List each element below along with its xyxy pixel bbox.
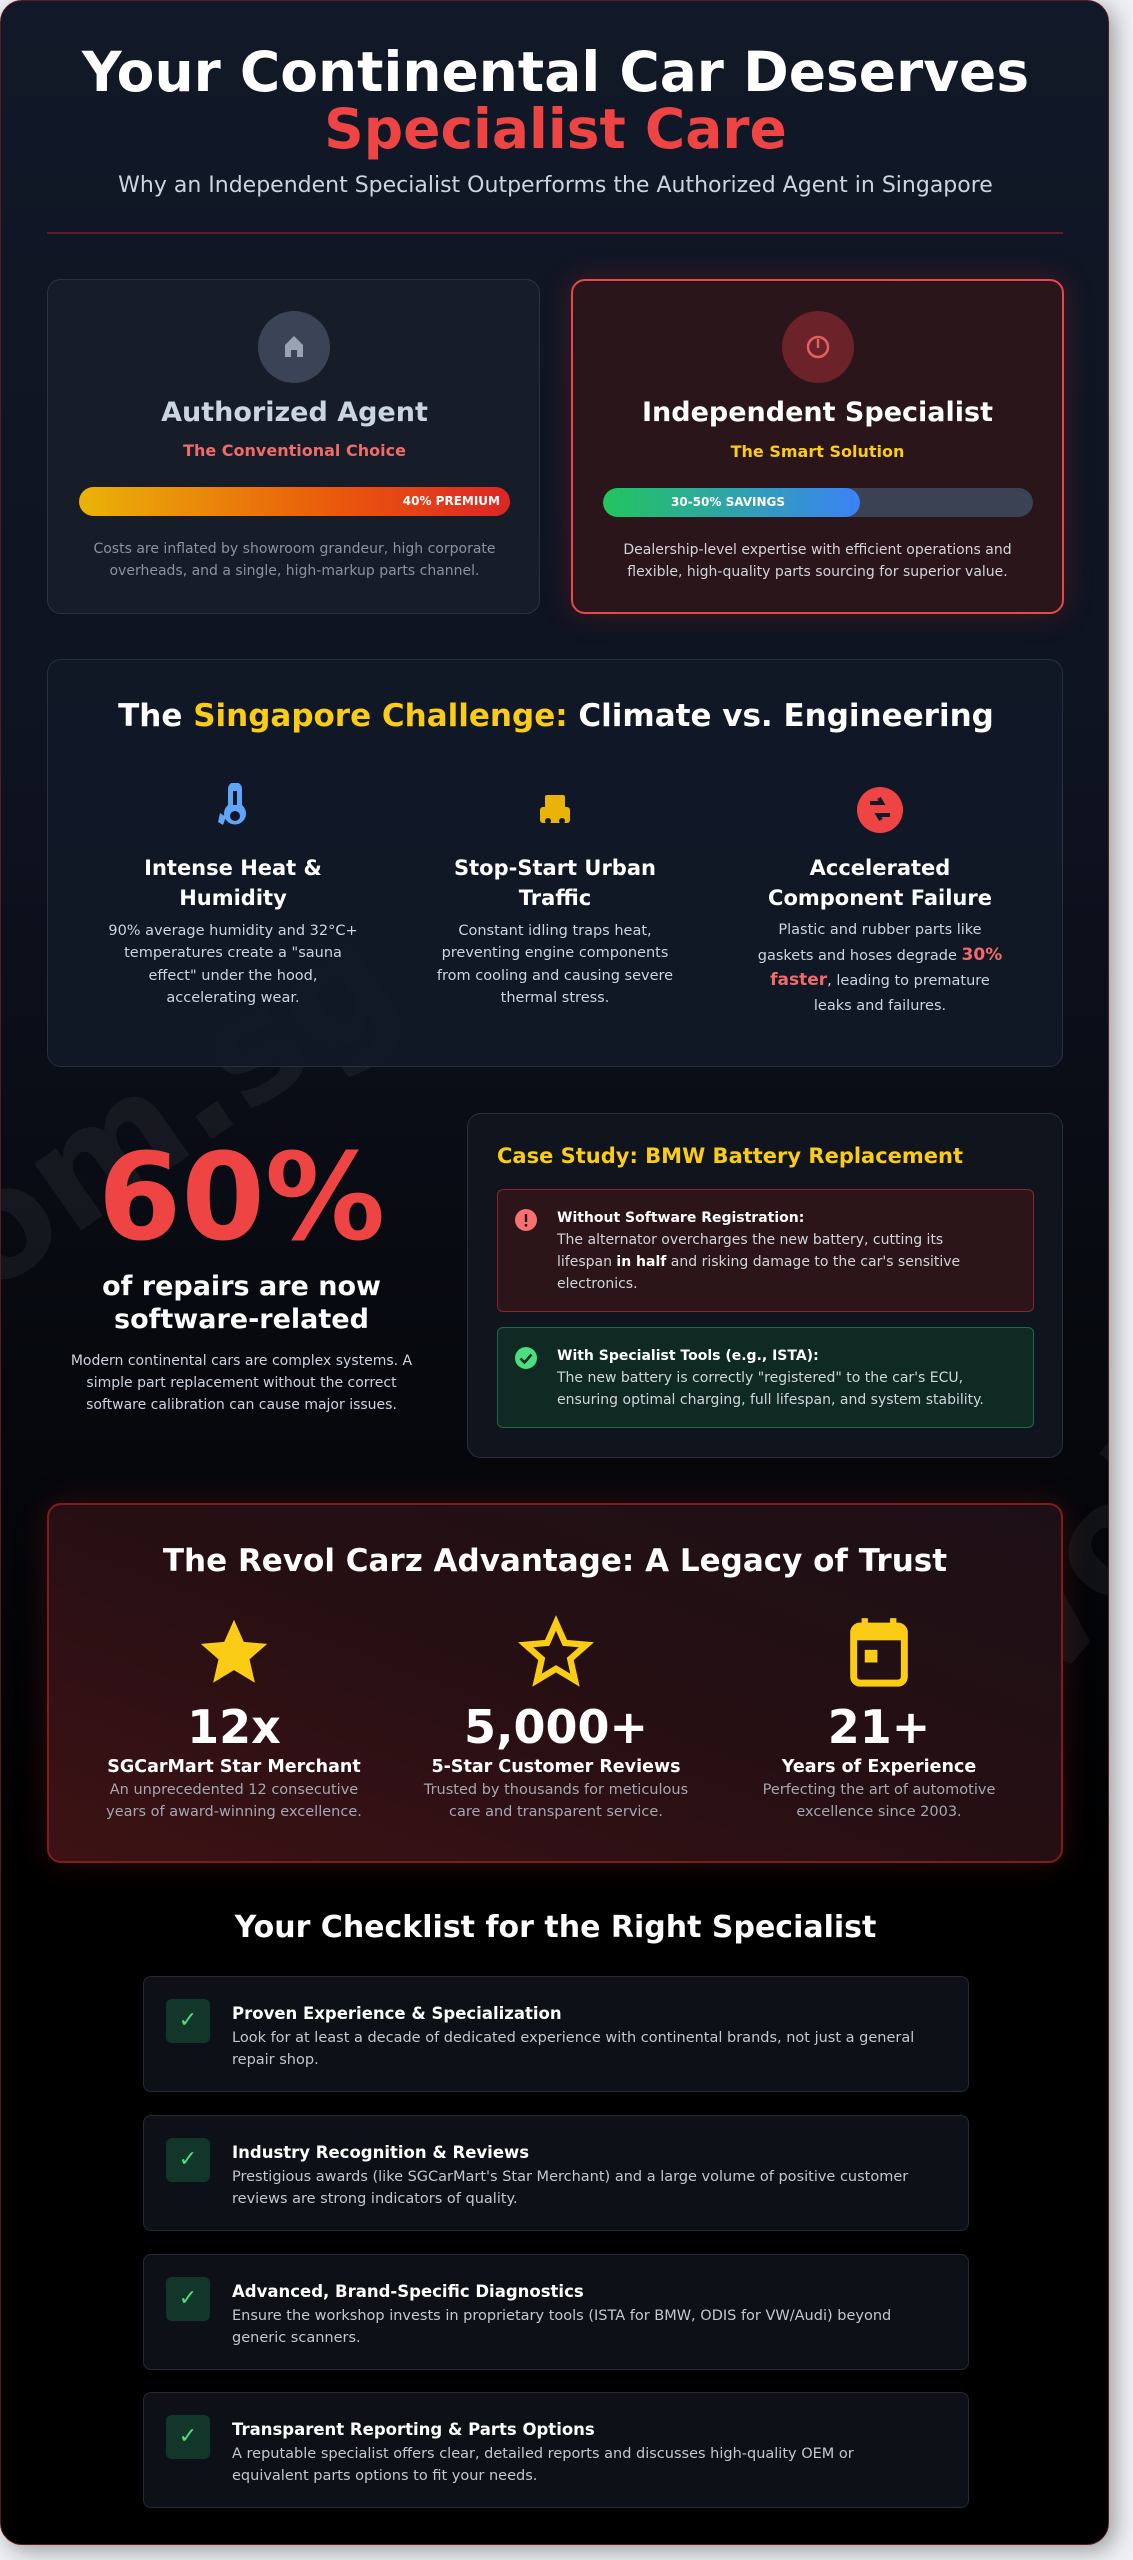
bar: premium: 40% PREMIUM <box>403 494 500 508</box>
icon: gauge <box>782 311 854 383</box>
icon: broken part <box>857 787 903 833</box>
column: heat <box>108 783 358 1006</box>
stat: reviews <box>424 1615 688 1820</box>
heading: Independent Specialist <box>642 397 993 428</box>
heading: The Singapore Challenge: Climate vs. Engineering <box>118 698 994 734</box>
subheading: The Conventional Choice <box>183 441 406 460</box>
checklist item 2: ✓ <box>179 2147 197 2172</box>
column: failure <box>758 787 1002 1014</box>
icon: house <box>258 311 330 383</box>
callout: with specialist tools: The new battery is correctly "registered" to the car's ECU, ensuring optimal charging, full lifespan, and system stability. <box>557 1370 984 1408</box>
bar: premium <box>79 487 510 516</box>
callout: without registration: Without Software Registration: <box>557 1210 804 1226</box>
stat: 60% software: of repairs are now software-related <box>102 1271 381 1335</box>
panel: authorized agent <box>47 279 540 614</box>
bar: savings: 30-50% SAVINGS <box>671 495 785 509</box>
stat: reviews: Trusted by thousands for meticulous care and transparent service. <box>424 1782 688 1820</box>
column: heat: Intense Heat & Humidity <box>144 856 322 910</box>
panel: independent specialist <box>571 279 1064 614</box>
callout: without registration <box>497 1189 1034 1312</box>
column: failure: faster, leading to premature <box>770 970 990 990</box>
checklist item 2: Prestigious awards (like SGCarMart's Star Merchant) and a large volume of positive customer <box>232 2169 908 2185</box>
checklist item 4 <box>143 2392 969 2508</box>
checklist item 2: Industry Recognition & Reviews <box>232 2143 529 2162</box>
subtitle: Why an Independent Specialist Outperforms the Authorized Agent in Singapore <box>118 173 993 198</box>
stat: 60% software <box>71 1129 412 1413</box>
callout: with specialist tools <box>497 1327 1034 1428</box>
heading: The Revol Carz Advantage: A Legacy of Trust <box>163 1543 947 1579</box>
stat: star merchant: 12x <box>187 1700 281 1754</box>
checklist item 3: ✓ <box>179 2286 197 2311</box>
callout: with specialist tools: With Specialist Tools (e.g., ISTA): <box>557 1348 819 1364</box>
stat: reviews: 5-Star Customer Reviews <box>431 1757 681 1777</box>
stat: star merchant: SGCarMart Star Merchant <box>107 1757 361 1777</box>
checklist item 1 <box>143 1976 969 2092</box>
column: heat: 90% average humidity and 32°C+ temperatures create a "sauna effect" under the hood, accelerating wear. <box>108 923 358 1006</box>
title: Your Continental Car Deserves <box>82 40 1029 104</box>
subheading: The Smart Solution <box>731 442 904 461</box>
stat: reviews: 5,000+ <box>464 1700 648 1754</box>
stat: 60% software: Modern continental cars are complex systems. A simple part replacement without the correct software calibration can cause major issues. <box>71 1353 412 1413</box>
panel: singapore challenge <box>47 659 1063 1067</box>
stat: years: 21+ <box>828 1700 930 1754</box>
callout: without registration: The alternator overcharges the new battery, cutting its lifespan in half and risking damage to the car's sensitive electronics. <box>557 1232 960 1292</box>
checklist item 4: ✓ <box>179 2424 197 2449</box>
title: Specialist Care <box>324 97 787 161</box>
stat: 60% software: 60% <box>98 1129 385 1268</box>
checklist item 1: Proven Experience & Specialization <box>232 2004 562 2023</box>
heading: Authorized Agent <box>161 397 428 428</box>
checklist item 4: Transparent Reporting & Parts Options <box>232 2420 595 2439</box>
checklist item 4: A reputable specialist offers clear, detailed reports and discusses high-quality OEM or <box>232 2446 854 2462</box>
stat: star merchant <box>106 1620 362 1820</box>
title <box>81 40 1029 161</box>
icon: thermometer <box>218 783 246 825</box>
column: traffic: Constant idling traps heat, preventing engine components from cooling and causing severe thermal stress. <box>437 923 673 1006</box>
description: Costs are inflated by showroom grandeur, high corporate overheads, and a single, high-markup parts channel. <box>93 541 496 579</box>
column: failure: leaks and failures. <box>814 998 946 1014</box>
checklist item 1: Look for at least a decade of dedicated experience with continental brands, not just a general <box>232 2030 914 2046</box>
icon: car <box>540 795 570 823</box>
checklist heading: Your Checklist for the Right Specialist <box>235 1910 876 1945</box>
checklist item 2 <box>143 2115 969 2231</box>
column: traffic <box>437 795 673 1006</box>
checklist item 4: equivalent parts options to fit your needs. <box>232 2468 537 2484</box>
column: failure: Accelerated Component Failure <box>768 856 992 910</box>
stat: years <box>763 1618 995 1820</box>
stat: star merchant: An unprecedented 12 consecutive years of award-winning excellence. <box>106 1782 362 1820</box>
checklist item 2: reviews are strong indicators of quality. <box>232 2191 518 2207</box>
checklist item 3 <box>143 2254 969 2370</box>
bar: savings <box>603 488 1033 517</box>
panel: revol carz advantage <box>47 1503 1063 1863</box>
checklist item 1: ✓ <box>179 2008 197 2033</box>
column: failure: Plastic and rubber parts like <box>778 922 982 938</box>
checklist item 3: Ensure the workshop invests in proprietary tools (ISTA for BMW, ODIS for VW/Audi) beyond <box>232 2308 891 2324</box>
description: Dealership-level expertise with efficient operations and flexible, high-quality parts sourcing for superior value. <box>623 542 1012 580</box>
column: failure: gaskets and hoses degrade 30% <box>758 944 1002 964</box>
checklist item 1: repair shop. <box>232 2052 319 2068</box>
heading: Case Study: BMW Battery Replacement <box>497 1144 963 1168</box>
checklist item 3: generic scanners. <box>232 2330 361 2346</box>
stat: years: Years of Experience <box>782 1757 976 1777</box>
checklist item 3: Advanced, Brand-Specific Diagnostics <box>232 2282 584 2301</box>
column: traffic: Stop-Start Urban Traffic <box>454 856 656 910</box>
stat: years: Perfecting the art of automotive excellence since 2003. <box>763 1782 995 1820</box>
panel: case study <box>467 1113 1063 1458</box>
